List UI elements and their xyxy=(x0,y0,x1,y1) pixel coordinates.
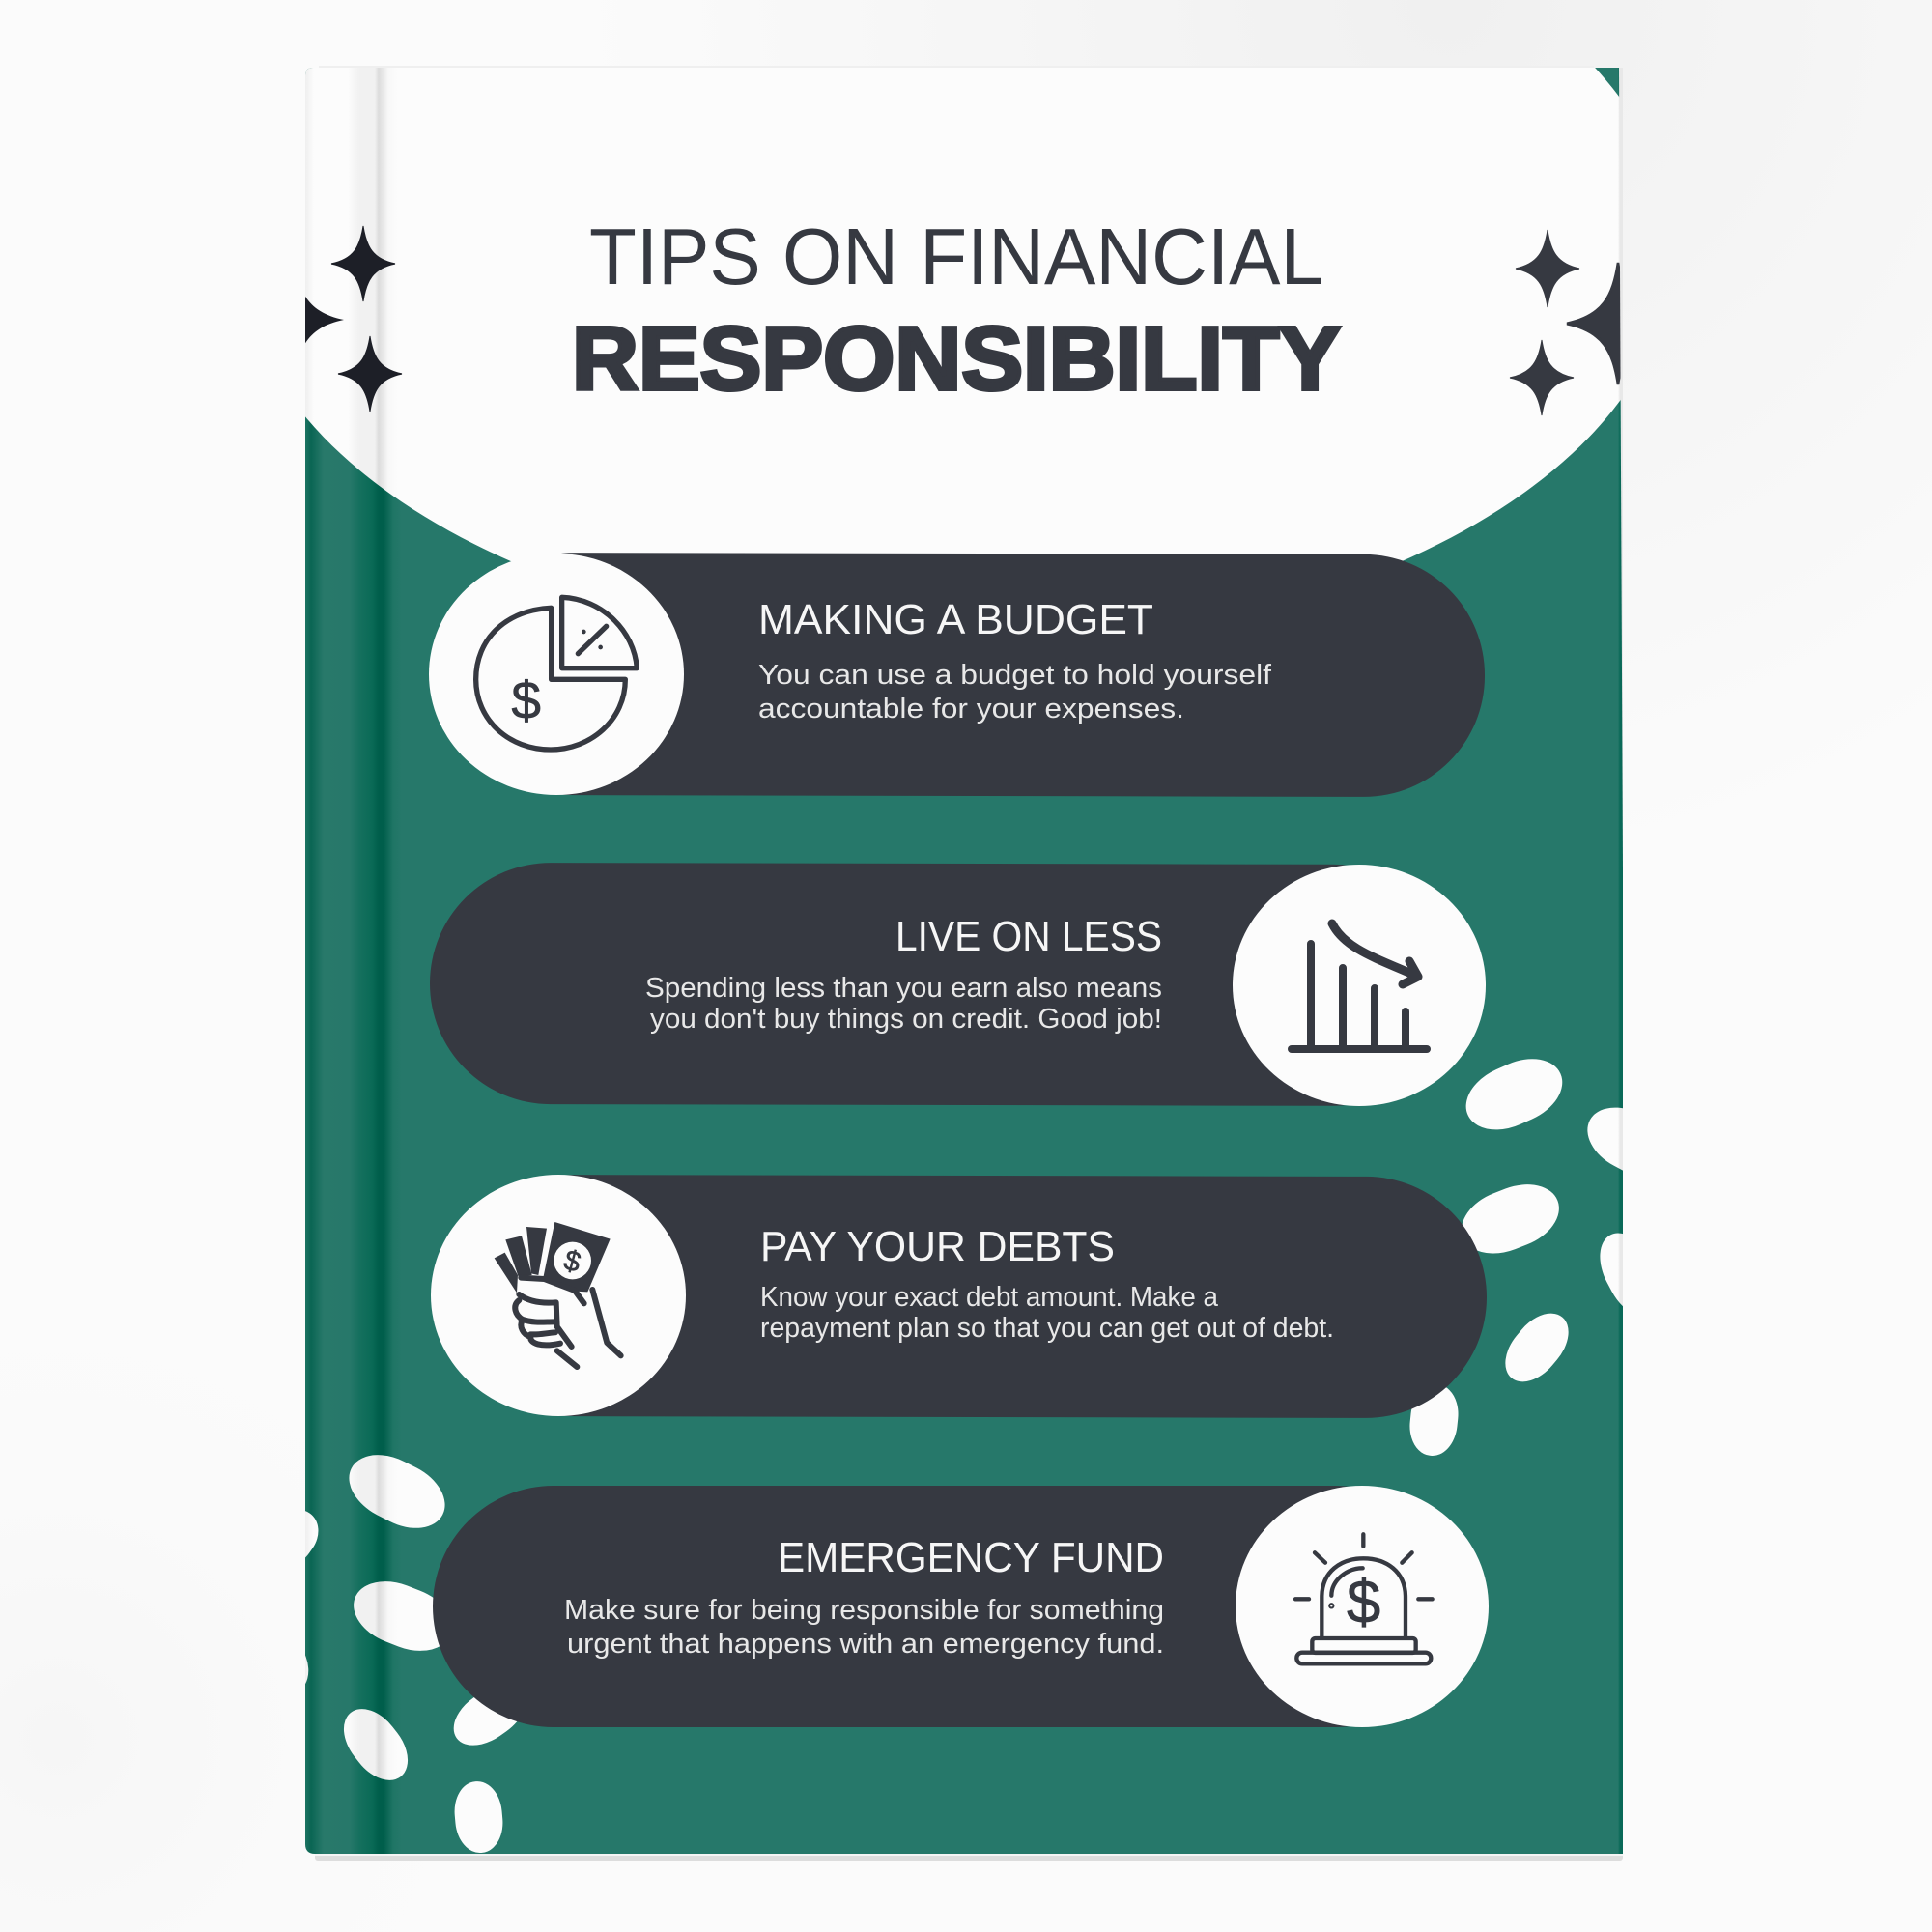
body text xyxy=(760,1282,1334,1344)
heading: PAY YOUR DEBTS xyxy=(760,1223,1115,1270)
right page edge xyxy=(1619,68,1623,869)
circle badge xyxy=(1236,1486,1489,1727)
icon: money siren xyxy=(1295,1534,1433,1663)
scattered left blobs xyxy=(305,1455,518,1853)
star: top right xyxy=(1516,230,1579,307)
circle badge xyxy=(1233,865,1486,1106)
body text xyxy=(758,660,1272,724)
book edge xyxy=(315,66,1623,1861)
body text: You can use a budget to hold yourself xyxy=(758,660,1272,691)
star: left edge xyxy=(305,296,344,344)
panel: live on less xyxy=(430,863,1486,1106)
body text xyxy=(564,1595,1164,1660)
icon: falling bar chart xyxy=(1292,923,1427,1049)
white spine top corner xyxy=(305,68,318,82)
heading: LIVE ON LESS xyxy=(895,913,1162,960)
icon: hand holding money: $ xyxy=(560,1244,584,1279)
body text: you don't buy things on credit. Good job! xyxy=(650,1004,1162,1035)
book cover xyxy=(305,68,1623,1854)
body text: Know your exact debt amount. Make a xyxy=(760,1282,1219,1313)
body text: accountable for your expenses. xyxy=(758,694,1184,724)
title line one: TIPS ON FINANCIAL xyxy=(589,212,1323,301)
pill background xyxy=(454,1175,1487,1418)
body text: urgent that happens with an emergency fund. xyxy=(567,1629,1164,1660)
circle badge xyxy=(431,1175,686,1416)
pill background xyxy=(433,1486,1457,1727)
star: top left xyxy=(331,226,395,301)
icon: pie chart: $ xyxy=(511,670,541,730)
circle badge xyxy=(429,554,684,795)
white header ellipse xyxy=(305,68,1621,562)
pill background xyxy=(430,863,1454,1106)
icon: hand holding money xyxy=(495,1222,621,1367)
panel: emergency fund xyxy=(433,1486,1489,1727)
panel: making a budget xyxy=(429,553,1485,797)
title line two: RESPONSIBILITY xyxy=(572,308,1341,409)
star: bottom right xyxy=(1510,340,1574,415)
scattered right blobs xyxy=(1409,1059,1623,1456)
panel: pay your debts xyxy=(431,1175,1487,1418)
body text: Make sure for being responsible for something xyxy=(564,1595,1164,1626)
body text xyxy=(645,973,1162,1035)
body text: repayment plan so that you can get out of debt. xyxy=(760,1313,1334,1344)
pill background xyxy=(454,553,1485,797)
title xyxy=(572,212,1341,409)
icon: money siren: $ xyxy=(1347,1569,1380,1636)
heading: EMERGENCY FUND xyxy=(778,1534,1164,1581)
body text: Spending less than you earn also means xyxy=(645,973,1162,1004)
icon: pie chart xyxy=(476,597,637,750)
star: right edge xyxy=(1567,263,1621,384)
green cover background xyxy=(305,68,1623,1854)
star: bottom left xyxy=(338,336,402,412)
heading: MAKING A BUDGET xyxy=(758,596,1153,643)
